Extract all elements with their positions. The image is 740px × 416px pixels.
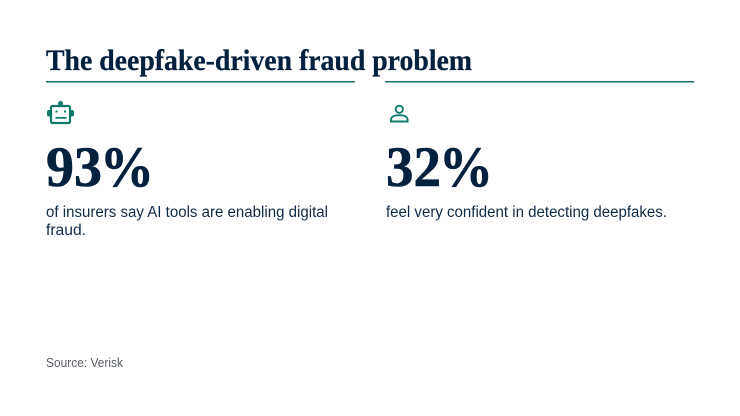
title: The deepfake-driven fraud problem: [46, 45, 472, 77]
description: 93%: of insurers say AI tools are enabling digital: [46, 204, 328, 221]
icon: person: [391, 106, 408, 122]
stat: 93%: 93: [46, 136, 102, 199]
stat: 93%: %: [100, 136, 154, 199]
panel: 32% stat: [385, 81, 694, 221]
icon: robot: [47, 101, 74, 123]
description: 93%: [46, 204, 328, 239]
stat: 32%: %: [439, 136, 493, 199]
panel: 93% stat: [46, 81, 355, 239]
description: 32%: feel very confident in detecting deepfakes.: [386, 204, 667, 221]
source note: Source: Verisk: [46, 355, 123, 370]
stat: 32%: 32: [386, 136, 441, 199]
description: 93%: fraud.: [46, 222, 86, 239]
